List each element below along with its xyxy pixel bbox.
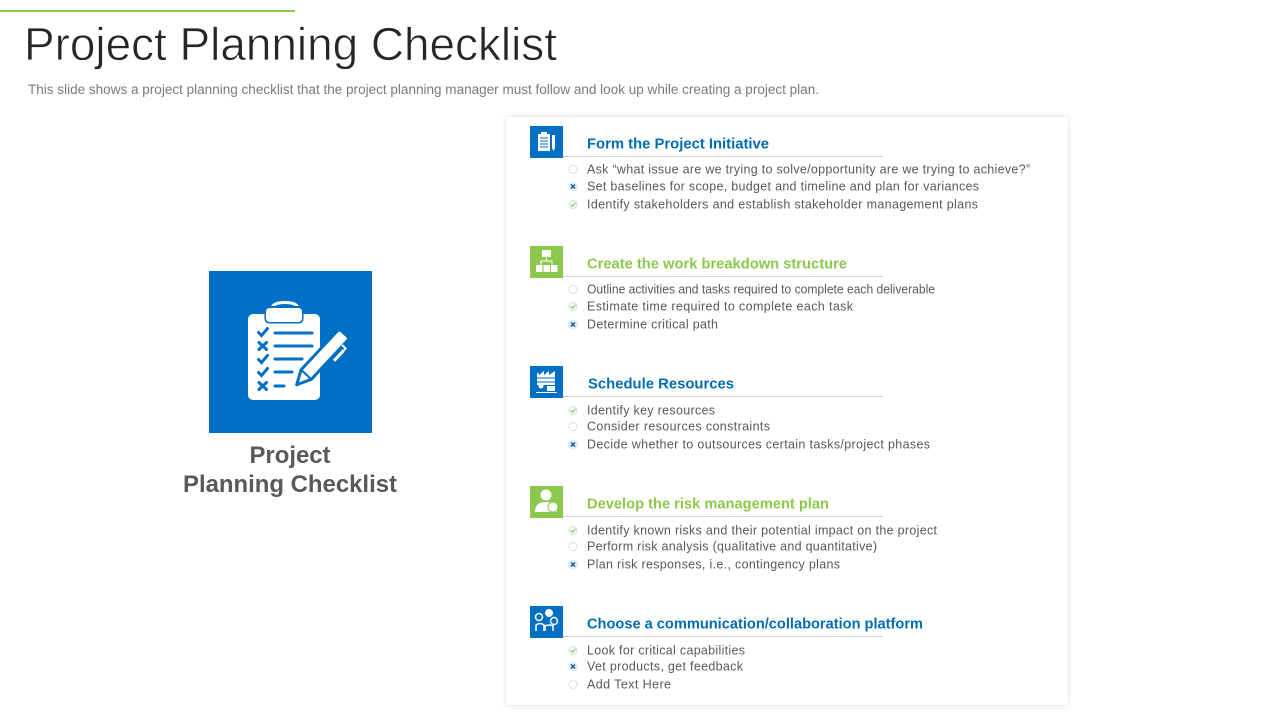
icon: clipboard and pencil [530,126,563,158]
section: form the project initiative [530,126,1030,212]
main label: Project [250,442,330,469]
section: form the project initiative: Ask “what issue are we trying to solve/opportunity are we trying to achieve?” [587,162,1030,176]
section: schedule resources: Consider resources constraints [587,420,770,434]
section: risk management plan: Develop the risk management plan [587,496,829,512]
icon: hierarchy chart [530,246,563,278]
icon: person with shield [530,486,563,518]
panel: checklist card [506,117,1068,705]
icon: factory and resources [530,366,563,398]
section: communication platform: Look for critical capabilities [587,644,745,658]
section: risk management plan: Perform risk analysis (qualitative and quantitative) [587,540,877,554]
main icon: clipboard and pen [209,271,372,433]
section: schedule resources: Schedule Resources [588,376,734,392]
section: communication platform: Add Text Here [587,678,671,692]
top accent line [0,10,295,12]
subtitle: This slide shows a project planning checklist that the project planning manager must follow and look up while creating a project plan. [28,82,819,97]
section: work breakdown structure: Create the work breakdown structure [587,256,847,272]
section: work breakdown structure [530,246,935,332]
title: Project Planning Checklist [24,18,557,70]
section: form the project initiative: Set baselines for scope, budget and timeline and plan for variances [587,180,979,194]
section: risk management plan: Identify known risks and their potential impact on the project [587,524,938,538]
main label: Planning Checklist [183,471,397,498]
section: communication platform: Vet products, get feedback [587,660,744,674]
main label [183,442,397,498]
section: risk management plan [530,486,938,572]
section: schedule resources: Decide whether to outsources certain tasks/project phases [587,438,930,452]
section: work breakdown structure: Estimate time required to complete each task [587,300,854,314]
section: risk management plan: Plan risk responses, i.e., contingency plans [587,558,840,572]
section: form the project initiative: Form the Project Initiative [587,136,769,152]
section: communication platform [530,606,923,692]
icon: collaboration people [530,606,563,638]
section: form the project initiative: Identify stakeholders and establish stakeholder management plans [587,198,978,212]
section: work breakdown structure: Determine critical path [587,318,718,332]
section: schedule resources [530,366,930,452]
section: work breakdown structure: Outline activities and tasks required to complete each deliverable [587,282,935,296]
section: schedule resources: Identify key resources [587,404,715,418]
section: communication platform: Choose a communication/collaboration platform [587,616,923,632]
